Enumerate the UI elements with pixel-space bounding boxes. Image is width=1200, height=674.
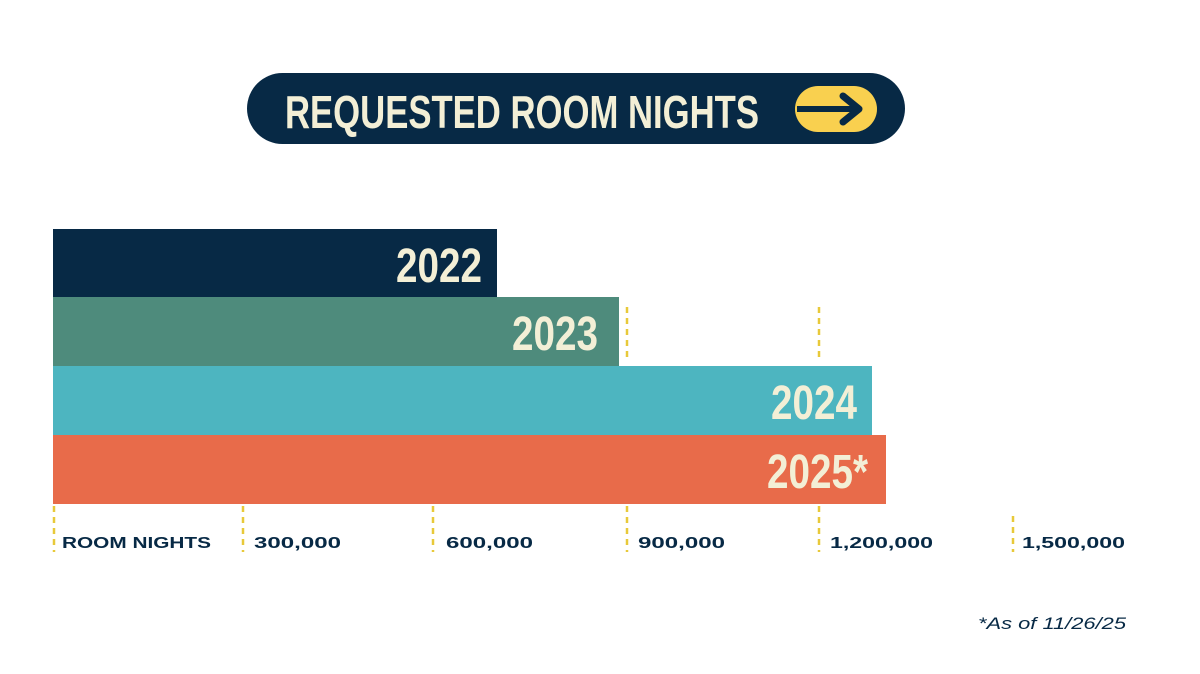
footnote: *As of 11/26/25 <box>978 614 1127 633</box>
title banner <box>247 73 905 144</box>
axis labels: 1,500,000 <box>1022 535 1125 552</box>
title text: REQUESTED ROOM NIGHTS <box>285 86 759 138</box>
upper gridline ticks <box>627 307 819 362</box>
axis ticks <box>54 506 1013 552</box>
axis labels: 900,000 <box>638 535 725 552</box>
axis labels: 300,000 <box>254 535 341 552</box>
bar: 2024: 2024 <box>771 377 857 430</box>
bar: 2025: 2025* <box>767 446 868 499</box>
bar: 2023 <box>53 297 619 366</box>
bar chart <box>53 229 886 504</box>
bar: 2023: 2023 <box>512 308 598 361</box>
icon: arrow pill <box>795 86 877 132</box>
axis labels <box>62 535 1125 552</box>
axis labels: 1,200,000 <box>830 535 933 552</box>
bar: 2022: 2022 <box>396 240 482 293</box>
bar: 2024 <box>53 366 872 435</box>
axis labels: 600,000 <box>446 535 533 552</box>
bar: 2022 <box>53 229 497 298</box>
axis labels: ROOM NIGHTS <box>62 535 211 552</box>
bar: 2025 <box>53 435 886 504</box>
